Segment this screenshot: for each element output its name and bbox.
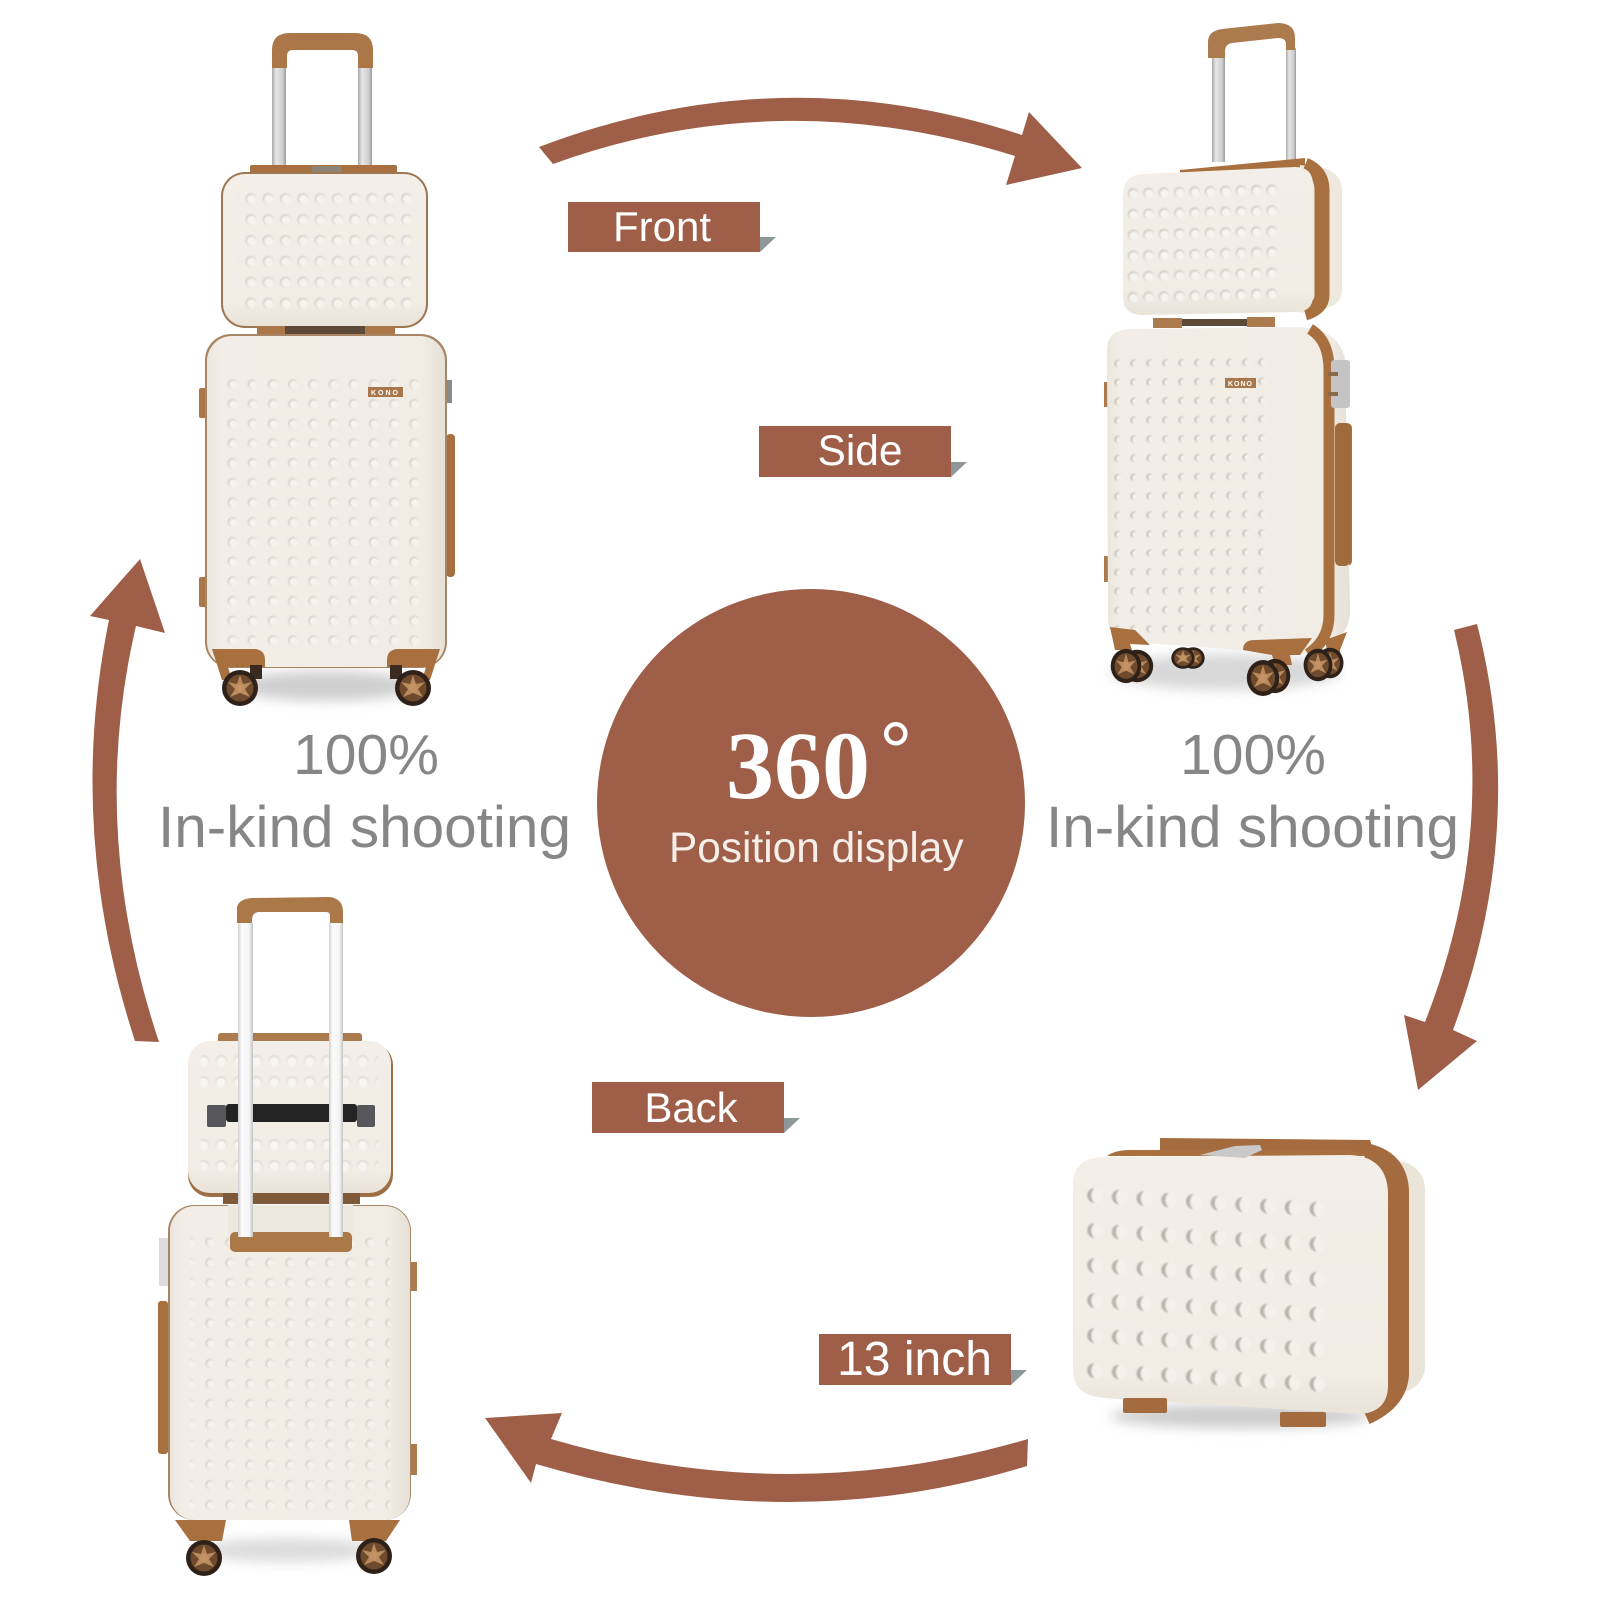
luggage photo: front view xyxy=(199,33,455,706)
label: Side xyxy=(759,426,967,477)
caption: right 100% in-kind shooting: In-kind shooting xyxy=(1046,795,1459,860)
label: Front: Front xyxy=(613,203,711,250)
central circle: 360 position display xyxy=(597,589,1025,1017)
central circle: 360 position display: Position display xyxy=(669,824,964,871)
caption: left 100% in-kind shooting: In-kind shooting xyxy=(158,795,571,860)
arrow: left, back to front xyxy=(90,559,165,1042)
arrow: top, front to side xyxy=(539,98,1082,185)
label: Front xyxy=(568,202,776,252)
label: Side: Side xyxy=(817,428,903,475)
label: Back xyxy=(592,1082,800,1133)
arrow: right, side to case xyxy=(1404,624,1498,1090)
caption: right 100% in-kind shooting xyxy=(1046,723,1459,860)
label: 13 inch: 13 inch xyxy=(837,1333,992,1386)
luggage photo: 13 inch vanity case xyxy=(1073,1138,1425,1428)
luggage photo: front view: KONO xyxy=(371,390,400,397)
label: Back: Back xyxy=(644,1084,739,1131)
luggage photo: side view: KONO xyxy=(1228,381,1253,388)
caption: left 100% in-kind shooting xyxy=(158,723,571,860)
luggage photo: back view xyxy=(158,897,417,1576)
caption: left 100% in-kind shooting: 100% xyxy=(293,723,439,787)
central circle: 360 position display: 360 xyxy=(726,712,870,819)
luggage photo: side view xyxy=(1104,23,1352,696)
central circle: 360 position display: ° xyxy=(879,705,913,799)
caption: right 100% in-kind shooting: 100% xyxy=(1180,723,1326,787)
arrow: bottom, case to back xyxy=(485,1413,1028,1502)
